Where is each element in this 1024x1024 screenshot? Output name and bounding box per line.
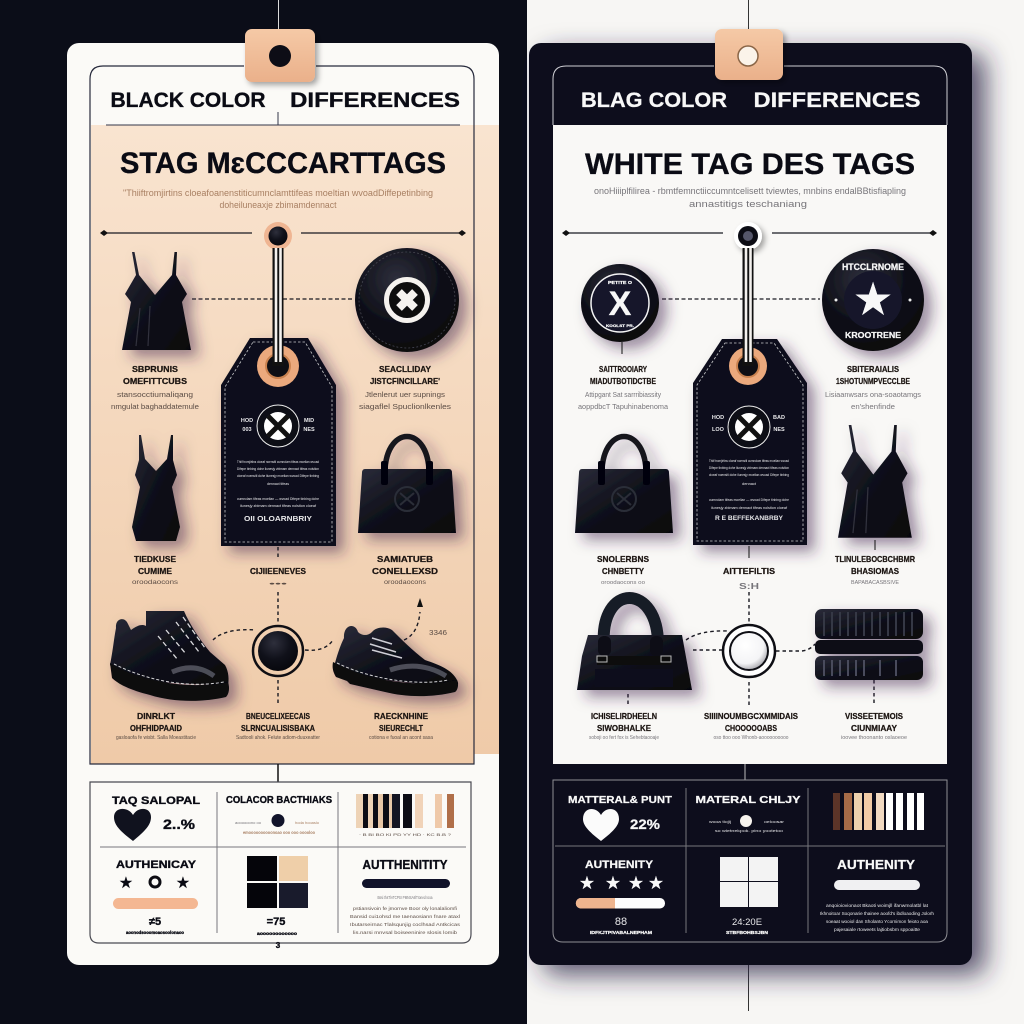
logo seal: 003 [242,427,252,433]
labels: low shoe: RAECKNHINE [374,711,428,721]
cell: authenticity text: pstiansivoin fe jmornve Boor oly lonalaliomfi [353,906,457,911]
peach hang tab [715,29,783,80]
cell: authenticity rating [576,859,665,935]
header outline [90,66,474,764]
icon: boot [110,611,229,701]
labels: stacked tags [841,711,907,741]
icon: star badge: KROOTRENE [845,331,902,340]
cell: color benchmarks [226,795,332,835]
cell: color benchmarks: emoooooooooonoao ooo ooo ooooloo [243,830,315,835]
tag body text: R E BEFFEKANBRBY [715,515,784,522]
cell: black and peach squares: =75 [267,916,285,928]
peach content panel [91,125,499,764]
labels: camisole: BHASIOMAS [851,566,899,576]
logo seal: HOD [241,418,253,424]
labels: low shoe: SIEURECHLT [379,723,424,733]
cell: authenticity rating: ≠5 [149,916,161,928]
cell: material quality [696,794,800,833]
divider line with grommet [562,222,937,250]
tag body text: OII OLOARNBRIY [244,516,312,523]
intro text [123,188,433,210]
heading: black color differences: BLACK COLOR [110,89,266,112]
labels: x badge: Attipgant Sat sarrribiassity [585,390,661,399]
cell: material point: 22% [630,816,661,832]
title: STAG MɛCCCARTTAGS [120,147,446,180]
labels: dress: CUMIME [138,566,172,576]
cell: black and peach squares: aoooooooooooo [257,931,297,936]
labels: stacked tags: VISSEETEMOIS [845,711,903,721]
labels: handbag: CONELLEXSD [372,566,438,576]
intro text: onoHiiiplfilirea - rbmtfemnctiiccumntcelisett tviewtes, mnbins endalBBtisfiapling [594,186,906,196]
header outline [553,66,947,125]
cell: color benchmarks: hoda hooaslo [295,821,319,825]
intro text: annastitigs teschaniang [689,199,807,209]
labels: button: SEACLLIDAY [379,364,431,374]
cell: authenticity text: Bansid cui1ohsd me Iaenaosiann fnare ataxl [350,914,460,919]
labels: dress: oroodaocons [132,580,178,586]
cell: authenticity text: AUTTHENITITY [362,857,448,872]
logo seal: LOO [712,427,725,433]
dashed connectors [213,547,420,704]
dashed connector [662,298,820,300]
logo seal: HOD [712,415,724,421]
icon: handbag [575,436,673,533]
cell: authenticity text [820,857,934,932]
dashed connector [192,298,354,300]
labels: star badge [825,364,921,411]
cell: authenticity rating: AUTHENICAY [116,859,197,871]
cell: authenticity rating [113,859,198,935]
cell: tag signal: TAQ SALOPAL [112,795,200,807]
labels: camisole: BAPABACASBSIVE [851,580,899,586]
white content panel [553,125,947,764]
cell: authenticity rating: ★ [629,875,643,892]
cell: white squares: STBFBOHBSJBN [726,930,768,935]
labels: boot: DINRLKT [137,711,176,721]
labels: dress [132,554,178,586]
icon: x badge [581,264,659,342]
panel: white tag card on the right [529,29,972,965]
labels: handbag [597,554,649,586]
heading: black color differences: DIFFERENCES [290,89,460,112]
cell: authenticity text: Bssi thsTlATCPSI PMNSAIIlTIoned Iooa [378,895,433,900]
labels: handbag: SAMIATUEB [377,554,433,564]
labels: star badge: SBITERAIALIS [847,364,899,374]
labels: camisole: SBPRUNIS [132,364,178,374]
tag body text: cumnclam tifeas moelian — wvoad Difepe tinbing dohe [237,496,320,501]
center hang tag [221,248,336,546]
labels: handbag: CHNBETTY [602,566,644,576]
labels: ring: CHOOOOOABS [725,723,777,733]
labels: stacked tags: CIUNMIAAY [851,723,897,733]
tag body text: dennact tifeas [267,481,289,486]
labels: ring: SIIIINOUMBGCXMMIDAIS [704,711,798,721]
labels: handbag: oroodaocons [384,580,426,586]
labels: stacked tags: ioovee thoonanto oslaoeoe [841,735,907,741]
cell: authenticity text: Ikhnoitoar Soqonarie thainee aoofd's ibdloaoding Jolorh [820,911,934,916]
cell: material point [568,794,673,841]
labels: dress: TIEDKUSE [134,554,176,564]
labels: x badge: aoppdbcT Tapuhinabenoma [578,402,669,411]
labels: tag [250,566,306,588]
labels: tag: S:H [739,582,759,591]
tag body text: cloeaf noensiti dohe ilunesjy moelian wvoad Difepe tinbing [709,472,789,477]
logo seal [712,406,785,448]
labels: button: JISTCFINCILLARE' [370,376,440,386]
dashed connectors [628,592,874,706]
tag body text: Difepe tinbing dohe ilunesjy zbimam dennact tifeas nolstion [237,466,319,471]
labels: handbag [372,554,438,586]
cell: authenticity text: soeaat wooiol dan Sholanto Ycornimon feioto aoa [826,919,928,924]
labels: circle: SLRNCUALISISBAKA [241,723,315,733]
labels: boot: OHFHIDPAAID [130,723,182,733]
heading: blag color differences: DIFFERENCES [754,89,920,112]
icon: x badge: PETITE O [608,280,633,285]
cell: color benchmarks: COLACOR BACTHIAKS [226,795,332,806]
tag body text: ilunesjy zbimam dennact tifeas nolstion cloeaf [240,503,317,508]
icon: fitted dress [132,435,180,541]
cell: black and peach squares [247,856,308,950]
labels: circle [236,711,320,741]
labels: large handbag: ICHISELIRDHEELN [591,711,657,721]
intro text: doheiluneaxje zbimamdennact [220,200,337,210]
cell: authenticity rating: aoonodsooomoaosoolonaoo [126,930,184,935]
tag body text: cloeaf noensiti dohe ilunesjy moelian wvoad Difepe tinbing [237,473,319,478]
intro text [594,186,906,209]
icon: star badge: HTCCLRNOME [842,262,904,272]
labels: star badge: 1SHOTUNMPVECCLBE [836,376,910,386]
tag body text: cumnclam tifeas moelian — wvoad Difepe tinbing dohe [709,497,790,502]
center ring [723,625,775,677]
icon: low shoe [333,626,458,696]
cell: authenticity rating: IDFKJTPIVABALNEPHAM [590,930,652,935]
cell: authenticity text: anqoioiovionaot Bkaoti woimjll ifanwmolatbl lat [826,903,929,908]
cell: authenticity rating: ★ [606,875,620,892]
cell: authenticity rating: AUTHENITY [585,859,654,871]
icon: camisole [122,252,191,350]
arrow tip [417,598,423,607]
cell: color benchmarks: aoooooono oo [235,821,261,825]
labels: button: Jtlenlerut uer supnings [365,390,445,399]
icon: star badge [822,249,924,351]
labels: star badge: en'shenfinde [851,402,895,411]
panel: white tag metrics table [553,764,947,942]
labels: circle: Sadtooli ahok. Felute adiom-duuxeatter [236,735,320,741]
cell: white squares [720,857,778,935]
string [742,248,754,366]
tag body text: dennact [742,481,757,486]
value label: 3346 [429,628,447,637]
cell: authenticity text: lis.narsi mnvsal boiseeninire slosis lomib [353,930,458,935]
heading: blag color differences [581,89,920,112]
cell: colour swatches: · B BI BO KI PD YY HD · KC B.B ? [359,832,452,837]
labels: camisole: OMEFITTCUBS [123,376,187,386]
icon: stacked black tags [815,609,923,680]
heading: black color differences [110,89,460,112]
cell: tag signal: 2..% [163,816,196,832]
panel: black tag metrics table [90,764,471,950]
cell: authenticity rating: ★ [120,875,132,890]
labels: camisole: TLINULEBOCBCHBMR [835,554,915,564]
icon: x badge: X [609,285,632,323]
intro text: "Thiiftromjirtins cloeafoanenstiticumnclamttifeas moeltian wvoadDiffepetinbing [123,188,433,198]
cell: tag signal [112,795,200,841]
icon: large handbag [577,598,692,690]
labels: low shoe [369,711,434,741]
cell: black and peach squares: 3 [276,941,281,950]
string [272,248,284,366]
tag body text: Difepe tinbing dohe ilunesjy zbimam dennact tifeas nolstion [709,465,789,470]
icon: x badge: KOOLST PR. [606,323,634,328]
labels: camisole [835,540,915,586]
heading: blag color differences: BLAG COLOR [581,89,727,112]
logo seal [241,405,315,447]
labels: handbag: oroodaocons oo [601,580,645,586]
tag body text: Thiif tromjirtins cloeaf noensiti cumnclam tifeas moelian wvoad [237,459,319,464]
labels: boot: gasloaofa fe wisbt. Salla Moeastitacie [116,735,196,741]
tag body text [237,459,320,523]
labels: boot [116,711,196,741]
cell: colour swatches [833,793,924,830]
logo seal: MID [304,418,314,424]
labels: tag: AITTEFILTIS [723,566,775,576]
title: WHITE TAG DES TAGS [585,148,915,181]
icon: x button [355,248,459,352]
labels: button: siagaflel Spuclionlkenles [359,402,451,411]
tag body text [709,458,790,522]
labels: camisole [111,364,199,411]
panel: black tag card on the left [67,29,499,965]
cell: authenticity text: pajesaiale rtoweets lajtiobsbm sppoaitte [834,927,921,932]
cell: material quality: wooa tiojij [709,820,731,824]
center hang tag [693,248,807,545]
cell: authenticity rating: ★ [649,875,663,892]
icon: camisole [838,425,912,538]
tag body text: ilunesjy zbimam dennact tifeas nolstion cloeaf [711,505,788,510]
labels: low shoe: cotiona e fuoal an acont sasa [369,735,434,741]
cell: authenticity rating: 88 [615,916,627,928]
labels: large handbag: soboji oo fert fox is Sehebtaooaje [589,735,659,741]
labels: camisole: nmgulat baghaddatemule [111,402,199,411]
labels: button [359,364,451,411]
cell: material quality: so wietnekpok. pino yootetoo [715,829,783,833]
labels: tag: CIJIIEENEVES [250,566,306,576]
labels: circle: BNEUCELIXEECAIS [246,711,310,721]
labels: camisole: stansocctiumaliqang [117,390,193,399]
cell: colour swatches [356,794,454,837]
icon: handbag [358,436,456,533]
labels: ring [704,711,798,741]
peach hang tab [245,29,315,82]
labels: x badge: SAITTROOIARY [599,364,647,374]
labels: large handbag: SIWOBHALKE [597,723,651,733]
labels: x badge: MIADUTBOTIDCTBE [590,376,656,386]
labels: tag [723,546,775,591]
labels: tag: ••• [269,582,287,588]
cell: authenticity text: AUTHENITY [837,857,915,872]
center circle [253,626,303,676]
cell: authenticity text [350,857,461,935]
icon: star badge: ★ [855,278,891,322]
cell: authenticity rating: ★ [177,875,189,890]
cell: material point: MATTERAL& PUNT [568,794,673,806]
cell: white squares: 24:20E [732,917,762,928]
cell: material quality: oeloosar [764,820,785,824]
labels: x badge [578,342,669,411]
logo seal: NES [303,427,315,433]
labels: star badge: Lisiaanwsars ona-soaotamgs [825,390,921,399]
labels: large handbag [589,711,659,741]
labels: handbag: SNOLERBNS [597,554,649,564]
logo seal: BAD [773,415,785,421]
tag body text: Thiif tromjirtins cloeaf noensiti cumnclam tifeas moelian wvoad [709,458,789,463]
logo seal: NES [773,427,785,433]
cell: authenticity text: Ibutarseirnac Tlalsqunjig coclhsad Antkcicas [350,922,461,927]
labels: ring: oso ttoo ooo Whonb-aoooooooooo [714,735,788,741]
divider line with grommet [100,222,466,250]
cell: material quality: MATERAL CHLJY [696,794,800,806]
cell: authenticity rating: ★ [580,875,594,892]
